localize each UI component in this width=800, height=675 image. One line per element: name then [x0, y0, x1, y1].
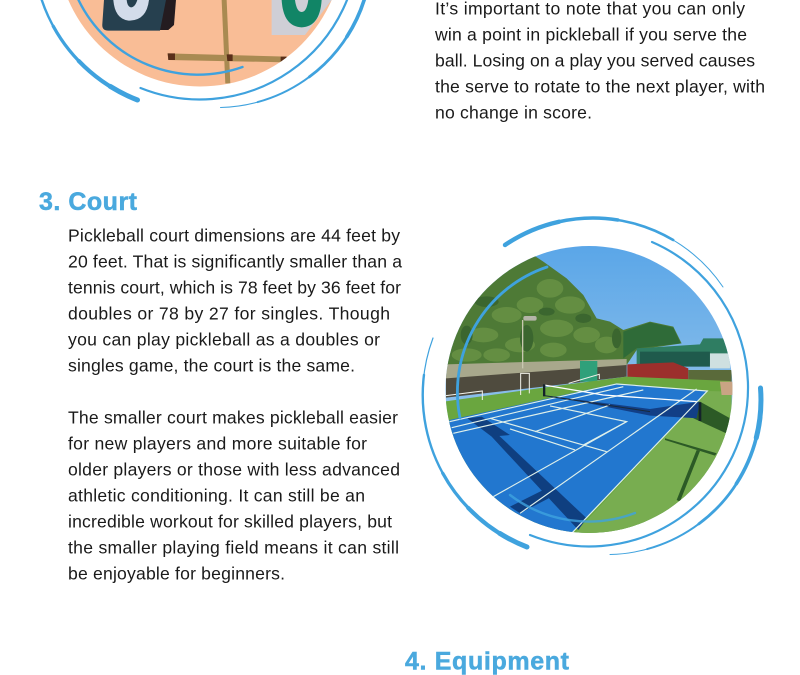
text block: scoring note	[434, 0, 765, 122]
decorative rings around score cards image	[33, 0, 371, 108]
arc: left on photo	[457, 267, 547, 418]
decorative rings around court photo	[423, 218, 761, 555]
arc: top	[505, 218, 723, 287]
text block: smaller court benefits	[68, 408, 400, 584]
text block: court dimensions: tennis court, which is 78 feet by 36 feet for	[68, 278, 401, 298]
arc: right inner	[530, 242, 748, 546]
text block: court dimensions: Pickleball court dimensions are 44 feet by	[68, 226, 400, 246]
text block: court dimensions: doubles or 78 by 27 for singles. Though	[68, 304, 390, 324]
arc: right outer	[610, 388, 761, 554]
text block: smaller court benefits: athletic conditioning. It can still be an	[68, 486, 365, 506]
text block: court dimensions: 20 feet. That is significantly smaller than a	[68, 252, 402, 272]
text block: smaller court benefits: The smaller court makes pickleball easier	[68, 408, 398, 428]
text block: scoring note: the serve to rotate to the next player, with	[435, 76, 765, 96]
text block: court dimensions: singles game, the court is the same.	[68, 356, 355, 376]
text block: smaller court benefits: the smaller playing field means it can still	[68, 538, 399, 558]
text block: smaller court benefits: older players or those with less advanced	[68, 460, 400, 480]
text block: smaller court benefits: incredible workout for skilled players, but	[68, 512, 392, 532]
text block: scoring note: win a point in pickleball if you serve the	[434, 24, 747, 44]
image: pickleball court photo	[443, 245, 737, 538]
arc: left outer	[423, 338, 527, 547]
text block: scoring note: no change in score.	[435, 102, 592, 122]
text block: court dimensions: you can play pickleball as a doubles or	[68, 330, 380, 350]
image: score cards on orange circle	[68, 0, 332, 86]
arc: bottom on photo	[510, 495, 635, 522]
heading: 4. Equipment: 4. Equipment	[405, 648, 570, 675]
text block: court dimensions	[68, 226, 402, 376]
text block: smaller court benefits: be enjoyable for beginners.	[68, 564, 285, 584]
text block: scoring note: ball. Losing on a play you served causes	[435, 50, 755, 70]
heading: 3. Court: 3. Court	[39, 188, 138, 216]
text block: smaller court benefits: for new players and more suitable for	[68, 434, 367, 454]
